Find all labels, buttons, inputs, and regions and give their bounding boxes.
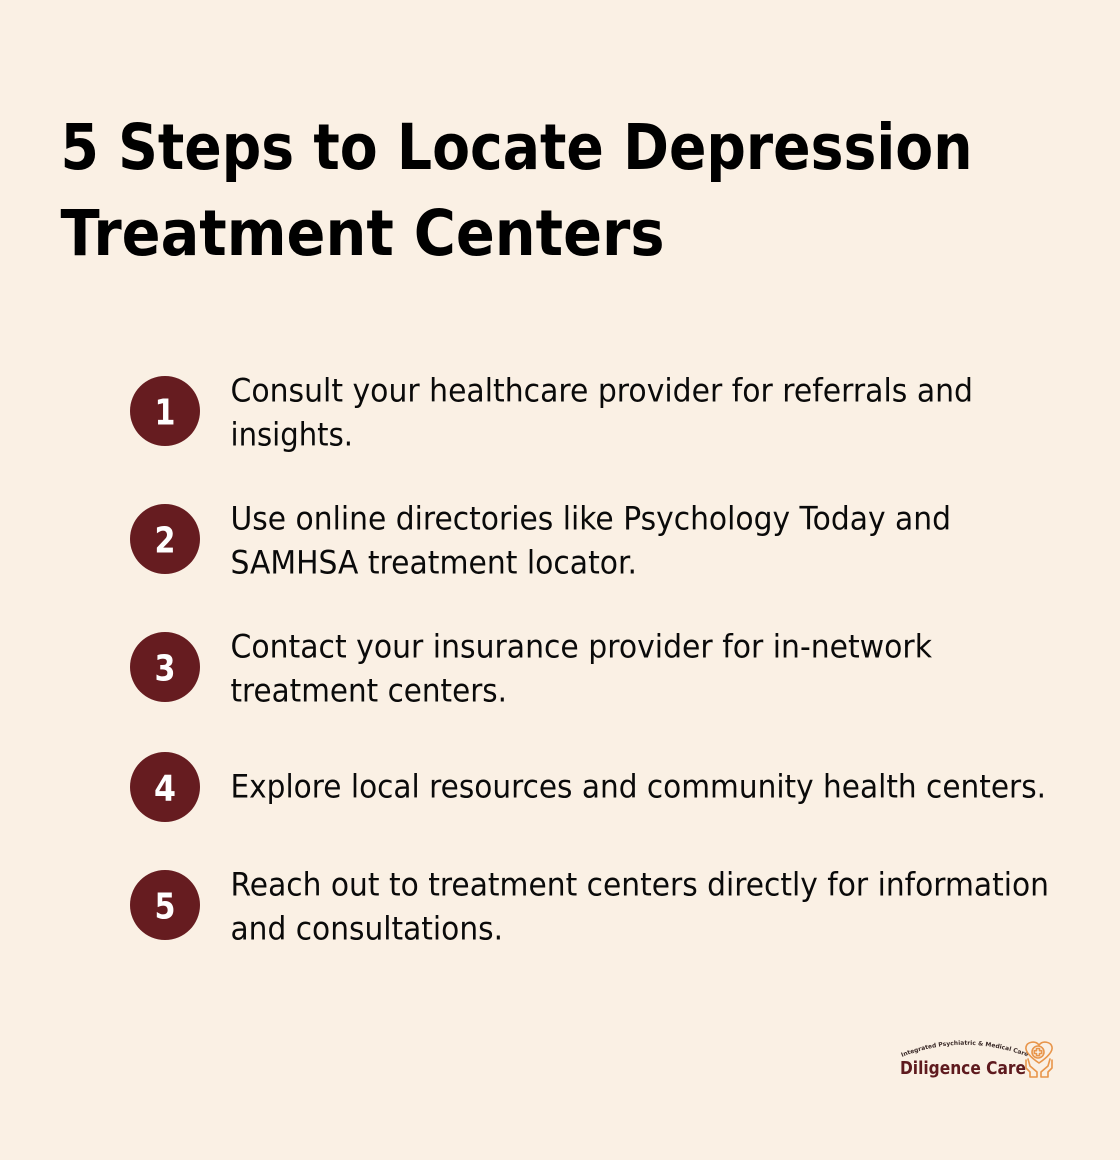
step 1 text: insights. — [230, 416, 353, 454]
step 5 number badge: 5 — [154, 886, 176, 928]
step 3 text: treatment centers. — [230, 672, 507, 710]
step 4 number badge — [130, 752, 200, 822]
step 1 number badge: 1 — [154, 392, 176, 434]
step 2 number badge: 2 — [154, 520, 176, 562]
step 4 number badge: 4 — [154, 768, 176, 810]
step 5 text: and consultations. — [230, 910, 503, 948]
step 3 text: Contact your insurance provider for in-network — [230, 628, 932, 666]
step 1 text: Consult your healthcare provider for referrals and — [230, 372, 973, 410]
step 2 text: SAMHSA treatment locator. — [230, 544, 637, 582]
step 3 number badge: 3 — [154, 648, 176, 690]
step 3 — [130, 628, 932, 710]
logo tagline: Integrated Psychiatric & Medical Care — [900, 1040, 1028, 1057]
step 1 — [130, 372, 973, 454]
step 1 number badge — [130, 376, 200, 446]
step 3 number badge — [130, 632, 200, 702]
icon: heart with cross held by hands — [1026, 1042, 1052, 1077]
step 2 — [130, 500, 951, 582]
step 5 text: Reach out to treatment centers directly for information — [230, 866, 1049, 904]
step 5 — [130, 866, 1049, 948]
logo: Diligence Care — [900, 1040, 1053, 1079]
step 4 — [130, 752, 1046, 822]
step 3 text — [230, 628, 932, 710]
step 5 text — [230, 866, 1049, 948]
step 2 text: Use online directories like Psychology Today and — [230, 500, 951, 538]
step 5 number badge — [130, 870, 200, 940]
title — [60, 111, 972, 270]
step 4 text: Explore local resources and community health centers. — [230, 768, 1046, 806]
step 2 number badge — [130, 504, 200, 574]
step 2 text — [230, 500, 951, 582]
logo wordmark: Diligence Care — [900, 1058, 1026, 1079]
title: 5 Steps to Locate Depression — [60, 111, 972, 184]
title: Treatment Centers — [60, 197, 664, 270]
step 1 text — [230, 372, 973, 454]
